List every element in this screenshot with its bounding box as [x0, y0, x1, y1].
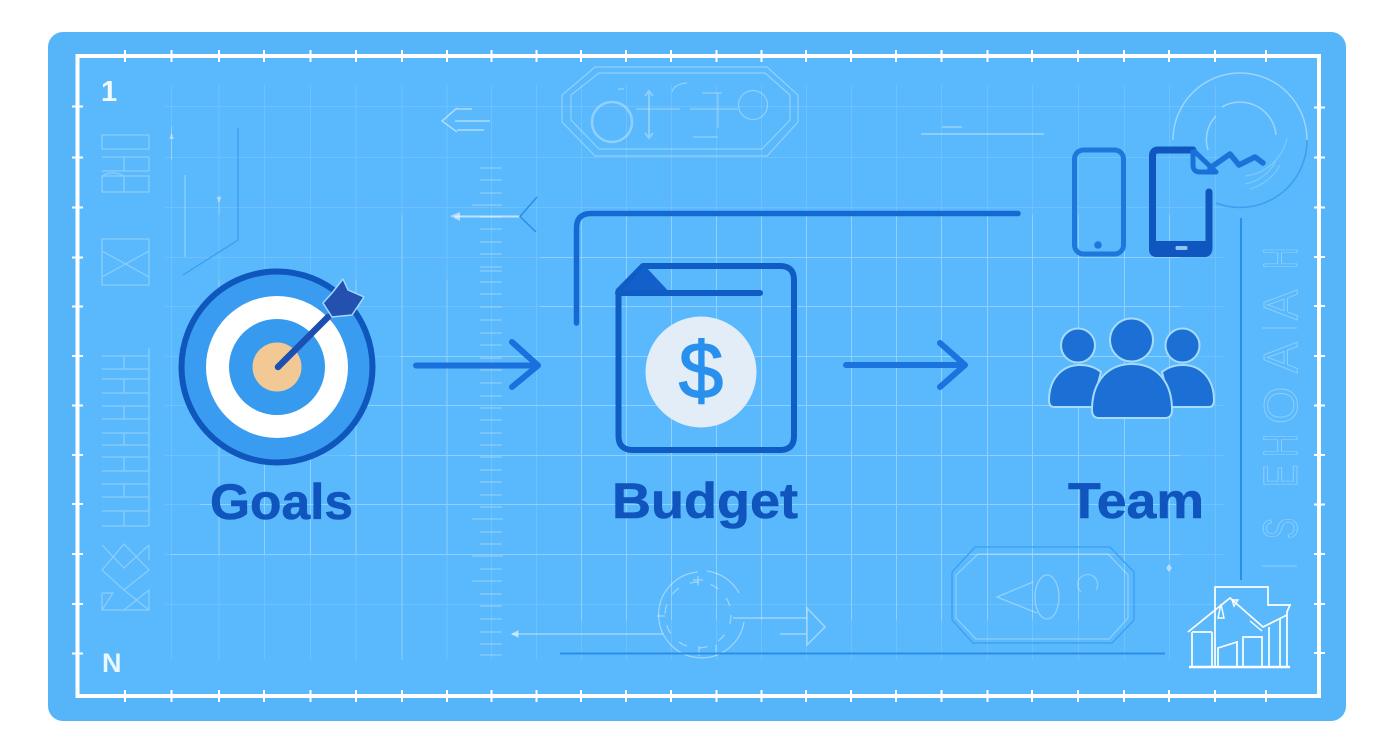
faint vertical lettering [1253, 248, 1308, 566]
faint vertical lettering: O [1255, 387, 1308, 424]
icon: team of three people [1049, 318, 1214, 418]
faint arrow: top left chevron [442, 108, 490, 132]
icon: solid phone with folded corner and trend line [1149, 150, 1263, 257]
blue vertical guide line [1240, 218, 1242, 580]
arrow: budget to team [846, 343, 965, 387]
faint sketch: left drawing column [102, 135, 149, 610]
connector: budget up to devices [576, 214, 1018, 323]
faint arrow: pointing left from ruler [450, 197, 537, 232]
faint sketch: left dimension lines [169, 127, 238, 275]
faint sketch: bottom circle with arrows [512, 571, 825, 658]
label: Team: Team [1068, 473, 1204, 529]
faint vertical lettering: H [1255, 248, 1308, 269]
icon: budget folder with dollar coin [618, 266, 794, 450]
faint sketch: concentric dial [1173, 73, 1307, 207]
arrow: goals to budget [416, 342, 538, 387]
icon: outline phone [1074, 150, 1124, 254]
faint vertical lettering: S [1253, 518, 1308, 539]
label: Budget: Budget [612, 473, 798, 529]
icon: budget folder with dollar coin: $ [679, 326, 723, 415]
icon: house and chart outline [1188, 587, 1290, 667]
centre vertical ruler [472, 168, 503, 655]
faint vertical lettering: A [1254, 341, 1308, 373]
frame with ruler ticks [72, 50, 1325, 702]
blue base line [560, 652, 1165, 654]
faint vertical lettering: A [1254, 290, 1307, 320]
faint sketch: bottom octagon plate [952, 547, 1172, 643]
corner label: 1: 1 [101, 76, 117, 108]
faint sketch: top right dimension line [921, 127, 1044, 134]
faint vertical lettering: H [1253, 434, 1308, 457]
label: Goals: Goals [210, 474, 353, 530]
faint vertical lettering: E [1253, 465, 1307, 487]
icon: target with arrow [182, 272, 372, 462]
corner label: N: N [102, 648, 122, 678]
faint sketch: top octagon plate [562, 67, 798, 156]
